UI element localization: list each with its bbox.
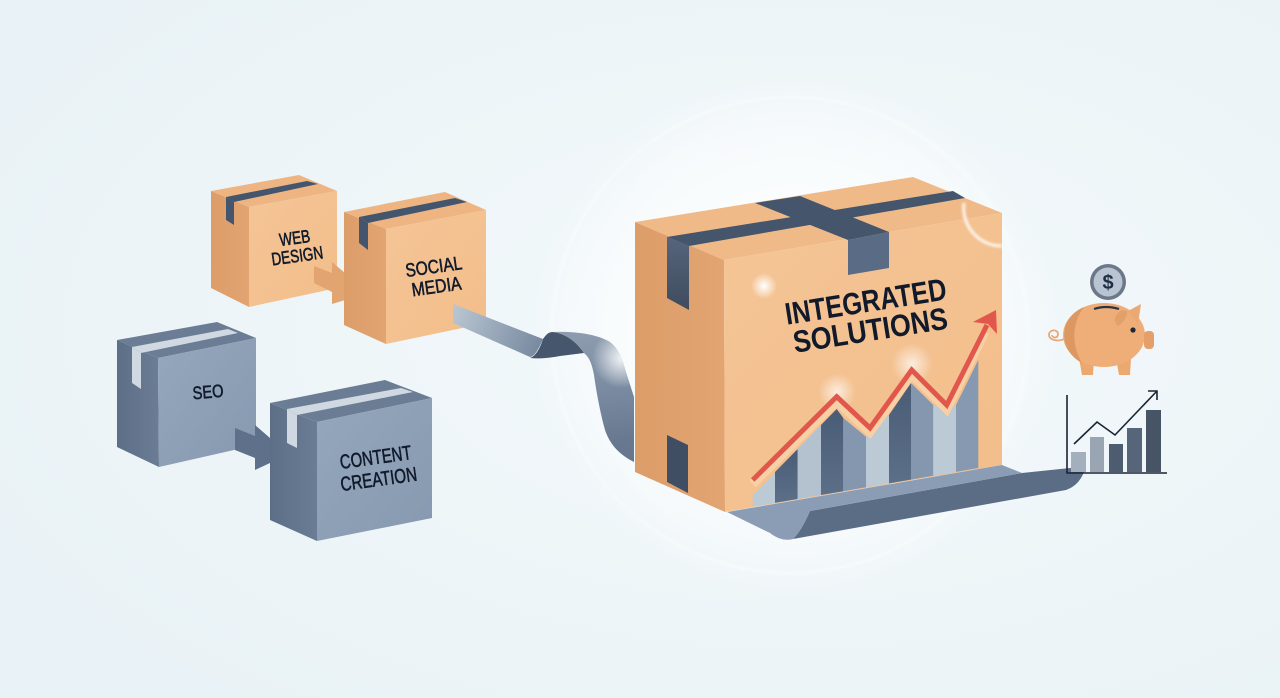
tape: left side lower: [667, 435, 688, 493]
glow halo behind main box: [530, 70, 1060, 600]
label: social media: SOCIAL: [404, 253, 464, 282]
label: web design: [268, 225, 324, 269]
box: web design: [211, 175, 337, 307]
icon: coin: [1090, 264, 1126, 300]
title text: INTEGRATED: [782, 272, 949, 332]
arrow: seo to content creation: [235, 425, 270, 470]
small bar chart: [1067, 391, 1167, 473]
title text: SOLUTIONS: [790, 301, 950, 360]
red growth arrow: [753, 310, 997, 484]
label: social media: [404, 253, 466, 302]
label: content creation: CREATION: [339, 464, 418, 496]
title text: [782, 272, 954, 360]
label: web design: WEB: [278, 226, 311, 250]
main box: integrated solutions: [635, 177, 1002, 512]
sparkles: [751, 273, 933, 411]
label: content creation: [336, 442, 418, 496]
box: seo: [117, 322, 256, 467]
icon: coin: $: [1102, 272, 1114, 294]
light ring accent: [964, 203, 1002, 246]
label: content creation: CONTENT: [339, 442, 413, 474]
floor ribbon under main box: [727, 465, 1084, 540]
label: social media: MEDIA: [410, 273, 463, 301]
tape: cross band: [755, 196, 889, 240]
ribbon connecting social media to main box: [453, 304, 634, 462]
icon: piggy bank: [1049, 303, 1154, 375]
tape: horizontal band: [667, 191, 965, 246]
bar chart on box: [753, 360, 978, 507]
label: seo: SEO: [192, 381, 224, 403]
label: web design: DESIGN: [270, 242, 324, 269]
box: content creation: [270, 380, 432, 541]
tape: cross band front flap: [848, 232, 889, 275]
box: social media: [344, 192, 486, 344]
tape: left side upper: [667, 237, 689, 310]
arrow: web design to social media: [314, 262, 345, 304]
